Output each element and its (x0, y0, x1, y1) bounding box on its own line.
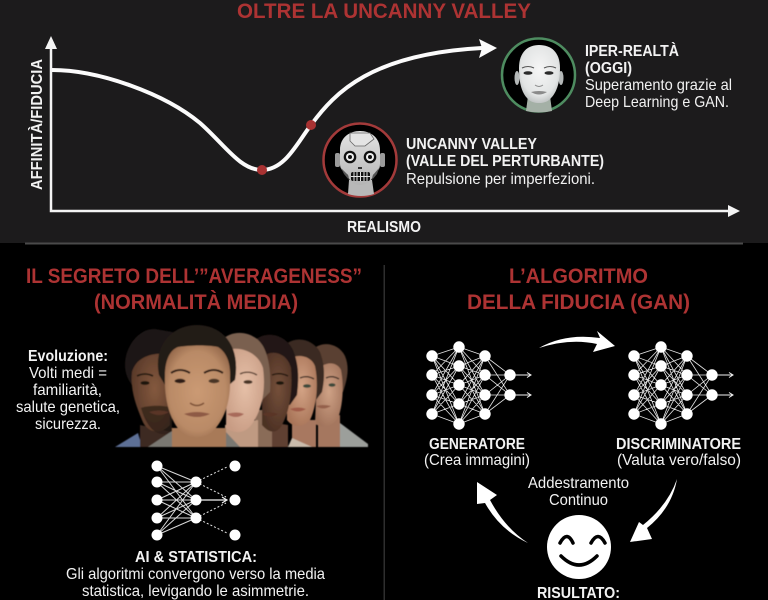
icon: hyper-real face (502, 38, 575, 112)
heading: DELLA FIDUCIA (GAN) (467, 291, 690, 314)
text: uncanny valley: Repulsione per imperfezioni. (406, 171, 595, 188)
chart axes (45, 36, 740, 217)
marker: valley point (257, 165, 267, 175)
divider (384, 265, 385, 600)
text: uncanny valley (406, 136, 604, 188)
text: continuous training: Addestramento (528, 475, 629, 492)
heading (26, 265, 362, 314)
icon: discriminator network (628, 341, 733, 430)
arrow: discriminator to result (630, 479, 677, 542)
text: hyper-reality: (OGGI) (585, 60, 632, 77)
arrow: curve head (479, 39, 497, 58)
icon: convergence network (152, 460, 240, 540)
image: averaged faces (115, 325, 368, 447)
arrow: result to generator (477, 482, 528, 543)
text: generator: (Crea immagini) (424, 452, 530, 469)
text: hyper-reality (585, 41, 732, 111)
text: hyper-reality: IPER-REALTÀ (585, 41, 679, 60)
panel: averageness (16, 265, 368, 600)
text: discriminator: (Valuta vero/falso) (617, 452, 741, 469)
text: evolution: familiarità, (33, 382, 102, 399)
icon: smiling face (547, 515, 611, 579)
heading (467, 265, 690, 314)
text: AI and statistics (66, 549, 325, 600)
heading: L’ALGORITMO (509, 265, 648, 288)
text: continuous training: Continuo (549, 492, 608, 509)
marker: rising point (306, 120, 316, 130)
text: hyper-reality: Deep Learning e GAN. (585, 94, 729, 111)
text: hyper-reality: Superamento grazie al (585, 77, 732, 94)
panel: GAN algorithm (424, 265, 741, 600)
text: evolution: Evoluzione: (28, 348, 108, 365)
icon: generator network (426, 341, 531, 430)
text: AI and statistics: AI & STATISTICA: (135, 549, 257, 566)
text: evolution (16, 348, 120, 433)
icon: robot (324, 124, 396, 196)
heading: (NORMALITÀ MEDIA) (94, 291, 298, 314)
text: uncanny valley: (VALLE DEL PERTURBANTE) (406, 153, 604, 170)
text: discriminator: DISCRIMINATORE (616, 436, 741, 453)
text: uncanny valley: UNCANNY VALLEY (406, 136, 537, 153)
text: generator: GENERATORE (429, 436, 525, 453)
uncanny curve (52, 48, 482, 170)
text: continuous training (528, 475, 629, 509)
text: discriminator (616, 436, 741, 469)
text: evolution: salute genetica, (16, 399, 120, 416)
panel: uncanny valley chart (0, 0, 768, 244)
heading: IL SEGRETO DELL’”AVERAGENESS” (26, 265, 362, 288)
arrow: generator to discriminator (539, 331, 615, 352)
text: evolution: Volti medi = (29, 365, 107, 382)
title: OLTRE LA UNCANNY VALLEY (237, 0, 531, 23)
text: AI and statistics: statistica, levigando le asimmetrie. (82, 583, 309, 600)
y axis label: AFFINITÀ/FIDUCIA (27, 59, 46, 190)
text: evolution: sicurezza. (35, 416, 101, 433)
x axis label: REALISMO (347, 219, 421, 236)
text: AI and statistics: Gli algoritmi convergono verso la media (66, 566, 325, 583)
text: generator (424, 436, 530, 469)
